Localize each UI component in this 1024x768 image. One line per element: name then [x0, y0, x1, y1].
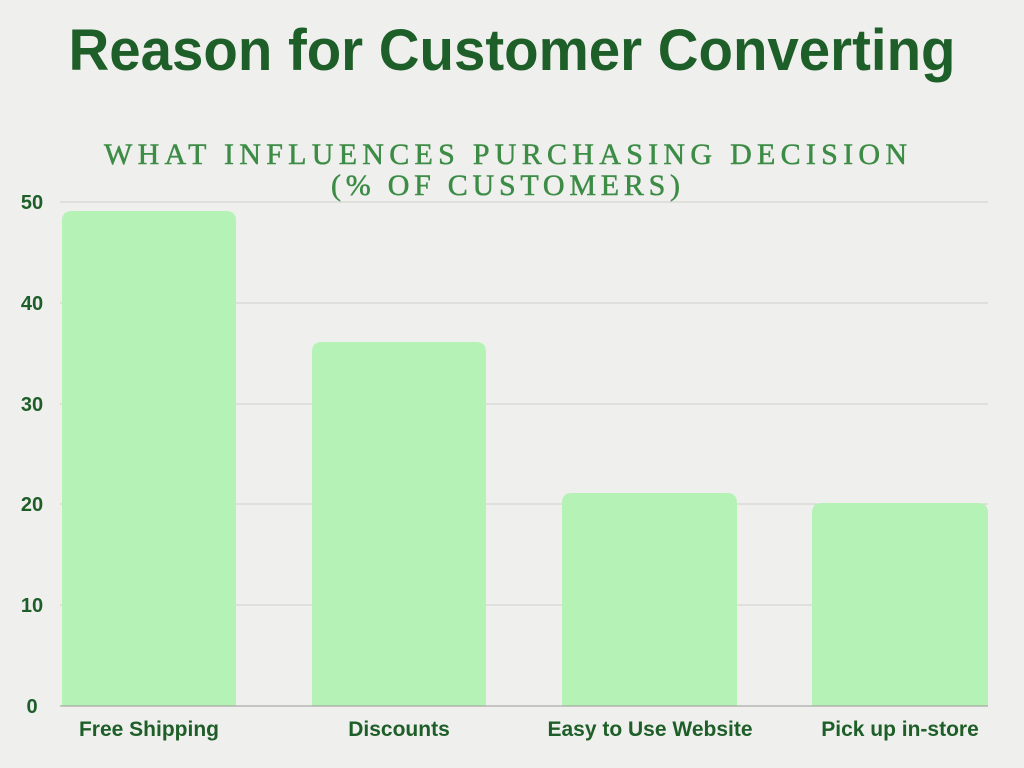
- y axis labels: 0: [26, 696, 38, 718]
- y axis labels: 30: [21, 394, 43, 416]
- title: Reason for Customer Converting: [68, 18, 956, 83]
- bar: Discounts: [312, 342, 486, 706]
- x axis labels: Discounts: [348, 718, 450, 741]
- y axis labels: [21, 192, 43, 718]
- x axis labels: Easy to Use Website: [547, 718, 753, 741]
- subtitle: WHAT INFLUENCES PURCHASING DECISION: [104, 138, 910, 171]
- x axis labels: [79, 718, 979, 741]
- bar chart: [62, 211, 988, 706]
- bar: Free Shipping: [62, 211, 236, 706]
- y axis labels: 10: [21, 595, 43, 617]
- subtitle: (% OF CUSTOMERS): [331, 169, 683, 202]
- x axis labels: Pick up in-store: [821, 718, 979, 741]
- bar: Pick up in-store: [812, 503, 988, 706]
- y axis labels: 50: [21, 192, 43, 214]
- y axis labels: 20: [21, 494, 43, 516]
- subtitle: [104, 138, 910, 202]
- bar: Easy to Use Website: [562, 493, 737, 706]
- y axis labels: 40: [21, 293, 43, 315]
- x axis labels: Free Shipping: [79, 718, 219, 741]
